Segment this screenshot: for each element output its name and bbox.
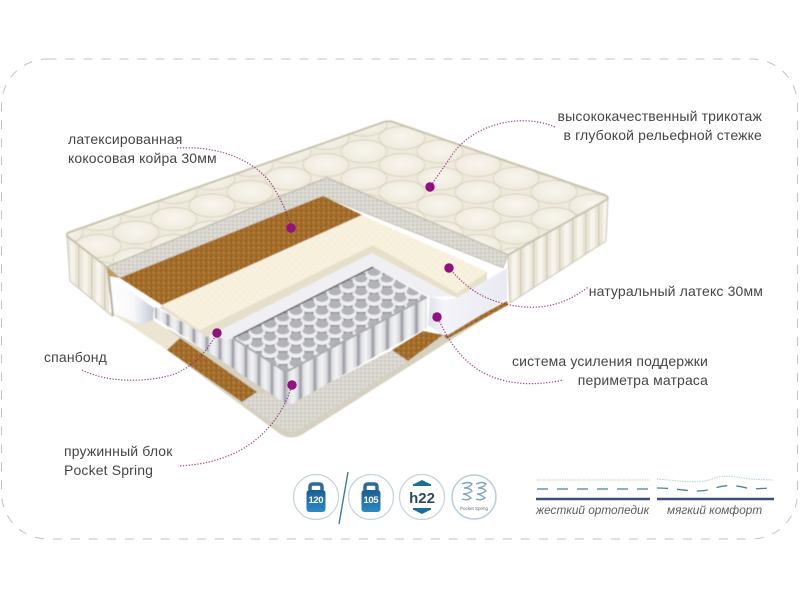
spring row under latex [155,307,288,405]
icon: height 22 [400,474,444,520]
spring block top [233,267,427,372]
icon: pocket spring: Pocket Spring [460,506,489,511]
leader: natural latex [449,268,588,307]
spring block frame [233,267,373,338]
spring block rim [233,297,427,372]
labels [44,108,763,478]
coconut strip right [443,301,508,339]
leader: spunbond [82,333,217,380]
diagram: firm orthopedic [535,480,650,517]
leader: coconut coir [177,148,291,228]
coconut top layer [120,196,362,305]
spring block right side [286,297,427,405]
leader lines [82,121,588,466]
dot: perimeter support [432,312,442,322]
icon: weight 120: 120 [308,495,324,506]
dot: natural latex [444,263,454,273]
white frame around springs [207,252,457,339]
label: knit cover: в глубокой рельефной стежке [563,127,762,143]
firmness diagrams [535,476,774,517]
base fabric [170,338,445,432]
coconut bottom left [167,338,257,402]
coconut bottom right [392,331,443,361]
label: coconut coir: латексированная [68,131,183,147]
coir rim at left [107,267,120,278]
spring block left side [233,338,288,405]
edge of left panel [107,267,113,316]
dot: coconut coir [286,223,296,233]
diagram: soft comfort [657,476,774,517]
dot: spunbond [212,328,222,338]
quilted top [67,121,608,267]
label: perimeter support: система усиления поддержки [512,353,708,369]
slash divider [339,472,348,524]
dashed page frame [2,59,798,539]
marker dots [212,182,454,390]
leader: knit cover [430,121,555,187]
dot: knit cover [425,182,435,192]
feature icons [294,472,496,524]
icon: height 22: h22 [409,490,435,507]
leader: perimeter support [437,316,563,384]
dot: pocket spring [287,380,297,390]
right white foam [428,268,507,335]
left side panel [67,237,112,316]
latex front lip [160,245,487,337]
icon: weight 120 [294,474,338,520]
beige step at left foot [110,312,180,350]
label: pocket spring: Pocket Spring [64,462,153,478]
leader: pocket spring [178,384,292,466]
icon: pocket spring [452,475,496,519]
right side panel [508,198,608,303]
label: natural latex: натуральный латекс 30мм [589,283,763,299]
gray fabric layer [107,178,508,278]
latex layer [162,215,488,330]
mattress bottom base [110,303,509,438]
label: spunbond: спанбонд [44,349,107,365]
mattress illustration [67,121,608,437]
label: knit cover: высококачественный трикотаж [558,108,762,124]
label: perimeter support: периметра матраса [578,372,708,388]
diagram: firm orthopedic: жесткий ортопедик [535,503,650,517]
label: coconut coir: кокосовая койра 30мм [68,150,217,166]
label: pocket spring: пружинный блок [64,443,173,459]
icon: weight 105 [348,474,394,520]
icon: weight 105: 105 [364,495,379,506]
left white foam [109,276,154,325]
diagram: soft comfort: мягкий комфорт [667,503,762,517]
